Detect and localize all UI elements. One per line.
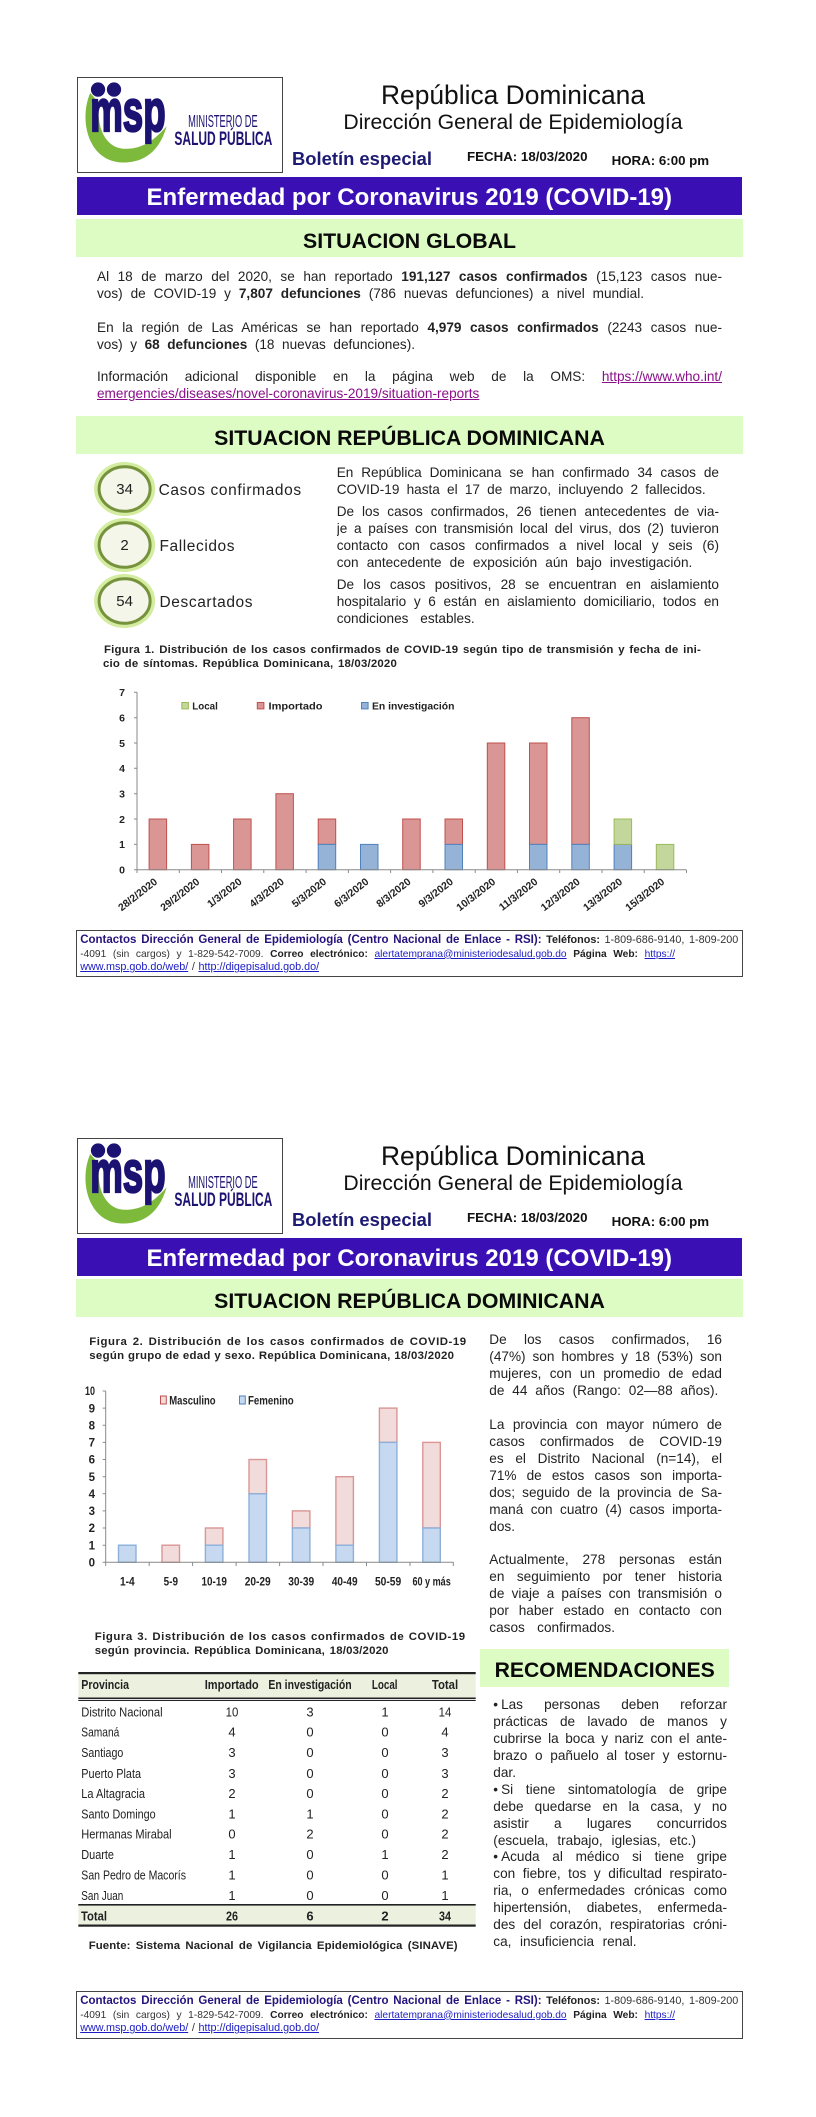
- date: FECHA: 18/03/2020: [467, 149, 587, 164]
- paragraph: sex and age: (47%) son hombres y 18 (53%) son: [489, 1349, 722, 1364]
- y axis labels: 4: [89, 1489, 96, 1501]
- recommendation: stay home: (escuela, trabajo, iglesias, etc.): [493, 1832, 696, 1848]
- table rows: 0: [381, 1868, 389, 1883]
- legend: Masculino: [169, 1394, 216, 1408]
- table rows: 0: [306, 1725, 314, 1740]
- title banner: Enfermedad por Coronavirus 2019 (COVID-19): [147, 184, 672, 211]
- contact text: www.msp.gob.do/web/ / http://digepisalud.gob.do/: [80, 961, 319, 973]
- table rows: 2: [441, 1847, 449, 1862]
- figure 2 title: según grupo de edad y sexo. República Dominicana, 18/03/2020: [89, 1350, 454, 1362]
- recommendation: see a doctor: con fiebre, tos y dificultad respirato-: [493, 1866, 727, 1881]
- heading: directorate: Dirección General de Epidemiología: [343, 1172, 683, 1195]
- page 1: [76, 77, 743, 977]
- paragraph: isolation: hospitalario y 6 están en aislamiento domiciliario, todos en: [337, 594, 719, 608]
- table rows: Santo Domingo: [81, 1807, 156, 1822]
- source note: Fuente: Sistema Nacional de Vigilancia Epidemiológica (SINAVE): [89, 1940, 458, 1952]
- table rows: Samaná: [81, 1725, 120, 1740]
- paragraph: isolation: [337, 576, 719, 626]
- figure 1 title: cio de síntomas. República Dominicana, 18/03/2020: [103, 658, 397, 670]
- paragraph: provinces: dos.: [489, 1519, 515, 1534]
- x axis labels: 40-49: [332, 1574, 358, 1588]
- contact box: [76, 930, 743, 977]
- table header: Provincia: [81, 1677, 130, 1692]
- table rows: 0: [381, 1766, 389, 1781]
- y axis labels: 10: [85, 1386, 95, 1398]
- recommendation: see a doctor: ca, insuficiencia renal.: [493, 1934, 637, 1949]
- paragraph: follow-up: en seguimiento por tener historia: [489, 1569, 722, 1584]
- table rows: 1: [441, 1868, 449, 1883]
- y axis labels: 6: [89, 1455, 95, 1467]
- table rows: 1: [228, 1807, 236, 1822]
- y axis labels: 5: [119, 738, 125, 750]
- x axis labels: [120, 1574, 451, 1588]
- x axis labels: 30-39: [288, 1574, 314, 1588]
- table rows: 0: [381, 1786, 389, 1801]
- paragraph: isolation: condiciones estables.: [337, 610, 475, 626]
- recommendation: see a doctor: hipertensión, diabetes, enfermeda-: [493, 1900, 727, 1915]
- x axis labels: 12/3/2020: [539, 877, 583, 914]
- table rows: 0: [306, 1745, 314, 1760]
- legend: [160, 1394, 294, 1408]
- table total row: 26: [226, 1908, 238, 1924]
- table rows: Puerto Plata: [81, 1766, 142, 1781]
- table header: [81, 1677, 458, 1692]
- y axis labels: 1: [89, 1540, 96, 1552]
- time: HORA: 6:00 pm: [612, 153, 709, 168]
- stat: discarded: 54: [116, 593, 133, 610]
- y axis labels: 9: [89, 1403, 95, 1415]
- text: WHO link: emergencies/diseases/novel-coronavirus-2019/situation-reports: [97, 386, 479, 401]
- x axis labels: 13/3/2020: [582, 877, 625, 914]
- recommendation: hygiene: brazo o pañuelo al toser y estornu-: [493, 1748, 727, 1762]
- paragraph: provinces: [489, 1417, 722, 1534]
- table rows: 0: [381, 1807, 389, 1822]
- logo: Ministerio de Salud Publica: MINISTERIO DE: [188, 1172, 257, 1192]
- paragraph: confirmed: [337, 464, 719, 497]
- bars: under investigation: [318, 844, 632, 870]
- x axis labels: 8/3/2020: [375, 877, 414, 910]
- table header: Local: [372, 1677, 398, 1692]
- table rows: 4: [228, 1725, 236, 1740]
- contact text: Contactos Dirección General de Epidemiología (Centro Nacional de Enlace - RSI): Teléfonos: 1-809-686-9140, 1-809-200: [80, 934, 738, 946]
- paragraph: follow-up: casos confirmados.: [489, 1620, 615, 1635]
- table total row: 2: [381, 1908, 389, 1924]
- text: global cases: Al 18 de marzo del 2020, se han reportado 191,127 casos confirmados (15,123 casos nue-: [97, 268, 722, 284]
- recommendation: hygiene: •Las personas deben reforzar: [493, 1696, 727, 1712]
- x axis labels: 15/3/2020: [624, 877, 667, 914]
- stat: confirmed: [97, 464, 301, 514]
- stat: deaths: [97, 520, 235, 570]
- table rows: 1: [381, 1847, 389, 1862]
- y axis labels: 8: [89, 1420, 96, 1432]
- recommendation: see a doctor: [493, 1849, 727, 1949]
- table rows: Hermanas Mirabal: [81, 1827, 172, 1842]
- paragraph: confirmed: COVID-19 hasta el 17 de marzo, incluyendo 2 fallecidos.: [337, 482, 706, 496]
- paragraph: sex and age: [489, 1332, 722, 1398]
- table header: Importado: [205, 1677, 259, 1692]
- bars: masculino: [162, 1408, 440, 1562]
- figure 3 title: Figura 3. Distribución de los casos confirmados de COVID-19: [95, 1631, 466, 1643]
- y axis labels: 3: [119, 788, 125, 800]
- table rows: 2: [441, 1807, 449, 1822]
- paragraph: transmission: De los casos confirmados, 26 tienen antecedentes de via-: [337, 504, 719, 518]
- logo: Ministerio de Salud Publica: [77, 1138, 283, 1234]
- text: WHO link: [97, 369, 722, 401]
- table rows: 0: [381, 1888, 389, 1903]
- recommendation: stay home: debe quedarse en la casa, y no: [493, 1798, 727, 1814]
- recommendation: hygiene: cubrirse la boca y nariz con el ante-: [493, 1730, 727, 1746]
- table rows: 0: [306, 1888, 314, 1903]
- heading: situacion republica dominicana: SITUACION REPÚBLICA DOMINICANA: [214, 1289, 605, 1313]
- heading: recomendaciones: [480, 1649, 729, 1687]
- y axis labels: 0: [119, 864, 125, 876]
- legend: [182, 702, 455, 712]
- bulletin label: Boletín especial: [292, 1209, 432, 1230]
- paragraph: transmission: contacto con casos confirmados a nivel local y seis (6): [337, 538, 719, 552]
- table rows: 2: [441, 1827, 449, 1842]
- x axis labels: 20-29: [245, 1574, 271, 1588]
- stat: discarded: Descartados: [160, 594, 253, 611]
- legend: Importado: [268, 702, 322, 712]
- legend: Femenino: [248, 1394, 294, 1408]
- paragraph: transmission: je a países con transmisión local del virus, dos (2) tuvieron: [337, 520, 719, 536]
- paragraph: provinces: casos confirmados de COVID-19: [489, 1434, 722, 1449]
- figure 3 title: [95, 1631, 466, 1657]
- table header: En investigación: [268, 1677, 352, 1692]
- text: Americas cases: [97, 320, 722, 352]
- figure 2 title: [89, 1336, 467, 1362]
- table rows: 3: [441, 1766, 449, 1781]
- text: WHO link: Información adicional disponible en la página web de la OMS: https://www.who.int/: [97, 369, 722, 384]
- table rows: 0: [306, 1766, 314, 1781]
- heading: situacion republica dominicana: [76, 1279, 743, 1317]
- x axis labels: 50-59: [375, 1574, 402, 1588]
- table rows: 3: [228, 1745, 236, 1760]
- x axis labels: 1-4: [120, 1574, 135, 1588]
- table total row: 34: [439, 1908, 452, 1924]
- text: global cases: [97, 268, 722, 301]
- x axis labels: 1/3/2020: [206, 877, 245, 910]
- text: Americas cases: En la región de Las Américas se han reportado 4,979 casos confirmados (2243 casos nue-: [97, 320, 722, 334]
- y axis labels: 3: [89, 1506, 95, 1518]
- table rows: 4: [441, 1725, 449, 1740]
- chart: cases by age group and sex: [85, 1386, 454, 1588]
- heading: directorate: Dirección General de Epidemiología: [343, 111, 683, 134]
- text: Americas cases: vos) y 68 defunciones (18 nuevas defunciones).: [97, 336, 415, 352]
- table rows: 0: [381, 1745, 389, 1760]
- recommendation: stay home: asistir a lugares concurridos: [493, 1816, 727, 1830]
- recommendation: hygiene: [493, 1696, 727, 1780]
- table rows: 0: [381, 1827, 389, 1842]
- y axis labels: 0: [89, 1558, 95, 1570]
- contact text: Contactos Dirección General de Epidemiología (Centro Nacional de Enlace - RSI): Teléfonos: 1-809-686-9140, 1-809-200: [80, 1995, 738, 2007]
- paragraph: isolation: De los casos positivos, 28 se encuentran en aislamiento: [337, 576, 719, 592]
- table total row: [81, 1908, 452, 1924]
- logo: Ministerio de Salud Publica: MINISTERIO DE: [188, 111, 257, 131]
- logo: Ministerio de Salud Publica: [77, 77, 283, 173]
- table rows: 1: [228, 1847, 236, 1862]
- table rows: 0: [306, 1786, 314, 1801]
- stat: discarded: [97, 576, 253, 626]
- contact text: [80, 934, 738, 973]
- table header: Total: [432, 1677, 458, 1692]
- table rows: 3: [441, 1745, 449, 1760]
- y axis labels: [85, 1386, 96, 1570]
- x axis labels: 28/2/2020: [117, 877, 160, 914]
- y axis labels: 2: [119, 814, 125, 826]
- contact box: [76, 1991, 743, 2039]
- y axis labels: 2: [89, 1523, 95, 1535]
- x axis labels: 6/3/2020: [333, 877, 371, 910]
- x axis labels: 9/3/2020: [417, 877, 456, 910]
- contact text: [80, 1995, 738, 2034]
- table rows: 2: [228, 1786, 236, 1801]
- table total row: 6: [306, 1908, 314, 1924]
- paragraph: follow-up: de viaje a países con transmisión o: [489, 1586, 722, 1601]
- paragraph: follow-up: por haber estado en contacto con: [489, 1603, 722, 1618]
- heading: situacion republica dominicana: [76, 416, 743, 454]
- paragraph: provinces: dos; seguido de la provincia de Sa-: [489, 1485, 722, 1500]
- recommendation: see a doctor: des del corazón, respiratorias cróni-: [493, 1917, 727, 1932]
- stat: deaths: Fallecidos: [160, 538, 235, 555]
- title banner: Enfermedad por Coronavirus 2019 (COVID-19): [147, 1245, 672, 1272]
- x axis labels: 10/3/2020: [455, 877, 498, 914]
- table rows: 1: [306, 1807, 314, 1822]
- table rows: Duarte: [81, 1847, 114, 1862]
- y axis labels: 7: [89, 1438, 95, 1450]
- table rows: 14: [439, 1704, 451, 1719]
- chart: cases by transmission and date: [117, 687, 687, 914]
- x axis labels: 60 y más: [412, 1574, 451, 1588]
- logo: Ministerio de Salud Publica: msp: [90, 1140, 165, 1205]
- heading: country: República Dominicana: [381, 1141, 645, 1171]
- text: national situation: [337, 464, 719, 626]
- recommendation: see a doctor: ria, o enfermedades crónicas como: [493, 1883, 727, 1898]
- legend: En investigación: [372, 702, 454, 712]
- table rows: [81, 1704, 451, 1903]
- y axis labels: 4: [119, 763, 125, 775]
- x axis labels: 29/2/2020: [159, 877, 202, 914]
- paragraph: transmission: [337, 504, 719, 570]
- table rows: 1: [228, 1888, 236, 1903]
- heading: situacion global: SITUACION GLOBAL: [303, 229, 516, 253]
- table rows: La Altagracia: [81, 1786, 146, 1801]
- recommendation: stay home: •Si tiene sintomatología de gripe: [493, 1782, 727, 1796]
- page 2: [76, 1138, 743, 2039]
- key figures: [94, 462, 301, 628]
- contact text: -4091 (sin cargos) y 1-829-542-7009. Correo electrónico: alertatemprana@ministeriodesalud.gob.do Página Web: https://: [80, 2010, 675, 2021]
- table rows: 0: [381, 1725, 389, 1740]
- table rows: 3: [228, 1766, 236, 1781]
- paragraph: sex and age: mujeres, con un promedio de edad: [489, 1366, 722, 1381]
- figure 1 title: Figura 1. Distribución de los casos confirmados de COVID-19 según tipo de transmisión y fecha de ini-: [104, 644, 701, 656]
- table rows: San Juan: [81, 1888, 123, 1903]
- table rows: 1: [381, 1704, 389, 1719]
- logo: Ministerio de Salud Publica: SALUD PÚBLICA: [174, 126, 272, 150]
- table rows: 0: [228, 1827, 236, 1842]
- recommendation: hygiene: dar.: [493, 1764, 516, 1780]
- y axis labels: 6: [119, 712, 125, 724]
- heading: situacion republica dominicana: SITUACION REPÚBLICA DOMINICANA: [214, 426, 605, 450]
- paragraph: provinces: 71% de estos casos son importa-: [489, 1468, 722, 1483]
- table rows: San Pedro de Macorís: [81, 1868, 186, 1883]
- figure 1 title: [103, 644, 701, 670]
- table total row: Total: [81, 1908, 107, 1924]
- heading: recomendaciones: RECOMENDACIONES: [495, 1659, 715, 1682]
- bars: imported: [149, 718, 589, 870]
- bars: femenino: [118, 1442, 440, 1562]
- y axis labels: 7: [119, 687, 125, 699]
- table rows: 0: [306, 1847, 314, 1862]
- paragraph: follow-up: Actualmente, 278 personas están: [489, 1552, 722, 1567]
- y axis labels: [119, 687, 125, 876]
- paragraph: provinces: maná con cuatro (4) casos importa-: [489, 1502, 722, 1517]
- stat: confirmed: 34: [116, 481, 133, 498]
- x axis labels: [117, 877, 667, 914]
- title banner: [77, 177, 742, 215]
- paragraph: sex and age: de 44 años (Rango: 02—88 años).: [489, 1383, 718, 1398]
- paragraph: follow-up: [489, 1552, 722, 1635]
- table rows: 10: [226, 1704, 238, 1719]
- bulletin label: Boletín especial: [292, 148, 432, 169]
- paragraph: provinces: La provincia con mayor número de: [489, 1417, 722, 1432]
- paragraph: provinces: es el Distrito Nacional (n=14), el: [489, 1451, 722, 1466]
- stat: confirmed: Casos confirmados: [159, 482, 301, 499]
- text: recommendations: [493, 1696, 727, 1949]
- recommendation: hygiene: prácticas de lavado de manos y: [493, 1714, 727, 1728]
- table rows: 2: [441, 1786, 449, 1801]
- x axis labels: 11/3/2020: [497, 877, 540, 913]
- recommendation: stay home: [493, 1782, 727, 1848]
- table rows: 2: [306, 1827, 314, 1842]
- text: global cases: vos) de COVID-19 y 7,807 defunciones (786 nuevas defunciones) a nivel mundial.: [97, 286, 644, 300]
- x axis labels: 4/3/2020: [248, 877, 287, 910]
- table rows: Distrito Nacional: [81, 1704, 163, 1719]
- date: FECHA: 18/03/2020: [467, 1210, 587, 1225]
- table rows: 0: [306, 1868, 314, 1883]
- heading: situacion global: [76, 219, 743, 257]
- text: demographics and follow-up: [489, 1332, 722, 1635]
- logo: Ministerio de Salud Publica: SALUD PÚBLICA: [174, 1187, 272, 1211]
- figure 3 title: según provincia. República Dominicana, 18/03/2020: [95, 1645, 389, 1657]
- table rows: Santiago: [81, 1745, 123, 1760]
- table rows: 1: [228, 1868, 236, 1883]
- bars: local: [614, 819, 674, 870]
- figure 2 title: Figura 2. Distribución de los casos confirmados de COVID-19: [89, 1336, 467, 1348]
- time: HORA: 6:00 pm: [612, 1214, 709, 1229]
- paragraph: sex and age: De los casos confirmados, 16: [489, 1332, 722, 1347]
- heading: country: República Dominicana: [381, 80, 645, 110]
- logo: Ministerio de Salud Publica: msp: [90, 79, 165, 144]
- contact text: -4091 (sin cargos) y 1-829-542-7009. Correo electrónico: alertatemprana@ministeriodesalud.gob.do Página Web: https://: [80, 949, 675, 960]
- table: cases by province: [78, 1672, 476, 1927]
- title banner: [77, 1238, 742, 1276]
- stat: deaths: 2: [120, 537, 129, 554]
- x axis labels: 5/3/2020: [290, 877, 329, 910]
- table rows: 3: [306, 1704, 314, 1719]
- recommendation: see a doctor: •Acuda al médico si tiene gripe: [493, 1849, 727, 1864]
- paragraph: transmission: con antecedente de exposición aún bajo investigación.: [337, 554, 692, 570]
- y axis labels: 5: [89, 1472, 96, 1484]
- legend: Local: [192, 702, 218, 712]
- x axis labels: 10-19: [202, 1574, 227, 1588]
- table rows: 1: [441, 1888, 449, 1903]
- x axis labels: 5-9: [164, 1574, 178, 1588]
- contact text: www.msp.gob.do/web/ / http://digepisalud.gob.do/: [80, 2022, 319, 2034]
- y axis labels: 1: [119, 839, 125, 851]
- paragraph: confirmed: En República Dominicana se han confirmado 34 casos de: [337, 464, 719, 480]
